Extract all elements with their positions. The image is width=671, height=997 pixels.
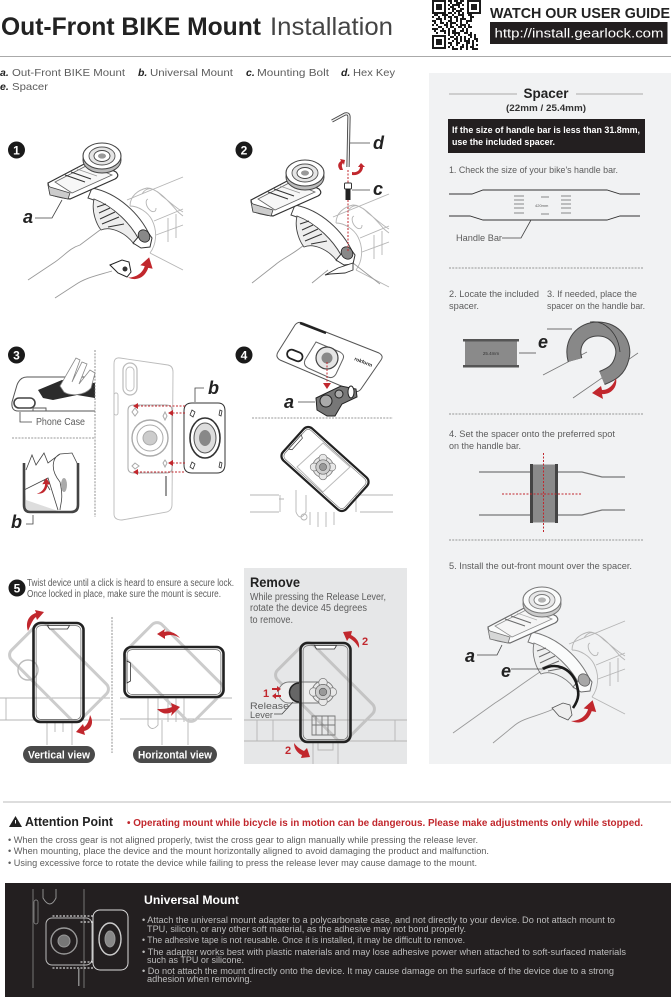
red arrow bbox=[571, 700, 596, 723]
step 5 text bbox=[27, 578, 234, 600]
parts legend: Hex Key bbox=[353, 67, 396, 79]
mount head bbox=[316, 386, 357, 416]
hex key bbox=[332, 114, 349, 167]
universal mount notes: TPU, silicon, or any other soft material, as the adhesive may not bond properly. bbox=[147, 924, 466, 934]
parts legend: Spacer bbox=[12, 81, 49, 93]
label b: b bbox=[208, 378, 219, 398]
cross gear bbox=[310, 454, 336, 480]
label a bbox=[465, 645, 502, 666]
number 2: 2 bbox=[362, 636, 368, 648]
attention bullets: • When the cross gear is not aligned properly, twist the cross gear to align manually while pressing the release lever. bbox=[8, 835, 478, 845]
wiping black area bbox=[38, 380, 95, 400]
panel: remove bbox=[244, 568, 407, 764]
handlebar bbox=[244, 720, 407, 764]
red guide arrows bbox=[133, 403, 185, 475]
step number 1 bbox=[8, 142, 25, 158]
remove text: While pressing the Release Lever, bbox=[250, 592, 386, 603]
label b bbox=[11, 512, 33, 532]
horizontal view pill: Horizontal view bbox=[138, 750, 212, 762]
lever hole bbox=[122, 266, 128, 272]
spacer notice: use the included spacer. bbox=[452, 137, 555, 147]
step 2 bbox=[236, 114, 389, 287]
spacer notice bbox=[448, 119, 645, 153]
step 4 bbox=[236, 322, 393, 527]
spacer notice: If the size of handle bar is less than 31.8mm, bbox=[452, 125, 640, 135]
panel: universal mount bbox=[5, 883, 671, 997]
handle bar diagram bbox=[449, 190, 640, 220]
QR code bbox=[432, 0, 481, 49]
lower scene handlebar bbox=[250, 495, 393, 527]
label c: c bbox=[373, 179, 383, 199]
step 1 bbox=[8, 142, 183, 298]
remove text: rotate the device 45 degrees bbox=[250, 603, 367, 614]
red arrow bbox=[128, 257, 153, 279]
label d: d bbox=[373, 133, 385, 153]
parts legend: a. bbox=[0, 67, 9, 79]
step number 5: 5 bbox=[14, 582, 21, 596]
remove text: to remove. bbox=[250, 615, 293, 626]
vertical view pill bbox=[23, 746, 95, 763]
mounting bolt bbox=[344, 183, 352, 200]
URL box: http://install.gearlock.com bbox=[494, 26, 664, 40]
URL box bbox=[490, 22, 668, 44]
rotation arrows bbox=[338, 159, 365, 175]
release lever label: Release bbox=[250, 701, 289, 712]
out-front mount bbox=[488, 587, 592, 692]
parts legend: Universal Mount bbox=[150, 67, 233, 79]
universal mount icon bbox=[33, 889, 128, 988]
number 2: 2 bbox=[285, 745, 291, 757]
steps 2 and 3 text: 2. Locate the included bbox=[449, 289, 539, 300]
release lever label: Lever bbox=[250, 710, 273, 721]
mount arm bbox=[278, 682, 335, 735]
cross plate bbox=[297, 443, 350, 492]
step number 5 bbox=[8, 580, 26, 596]
release lever bbox=[290, 683, 299, 702]
attention point heading: Attention Point bbox=[25, 815, 114, 829]
case back bbox=[114, 358, 173, 520]
title bbox=[1, 13, 393, 41]
label a: a bbox=[23, 207, 33, 227]
release lever label bbox=[250, 701, 293, 721]
phone case label bbox=[20, 412, 85, 428]
flat spacer bbox=[463, 339, 519, 368]
step number 2: 2 bbox=[241, 144, 248, 158]
red arrow bottom bbox=[294, 743, 310, 758]
parts legend: c. bbox=[246, 67, 255, 79]
title: Installation bbox=[270, 13, 393, 41]
handlebar clamp bbox=[569, 621, 625, 714]
out-front mount bbox=[48, 143, 152, 248]
spacer on bar diagram bbox=[479, 453, 625, 533]
spacer heading: Spacer bbox=[524, 85, 569, 101]
parts legend: Out-Front BIKE Mount bbox=[12, 67, 125, 79]
red arrow bbox=[592, 378, 616, 399]
step number 4: 4 bbox=[241, 348, 248, 362]
label b bbox=[195, 378, 219, 402]
parts legend: d. bbox=[341, 67, 350, 79]
label a: a bbox=[465, 646, 475, 666]
parts legend bbox=[0, 67, 396, 93]
cross gear bbox=[309, 678, 337, 706]
step 4 text: on the handle bar. bbox=[449, 441, 521, 452]
hand lines bbox=[252, 245, 380, 284]
dashed divider vertical bbox=[94, 350, 96, 517]
step number 2 bbox=[236, 142, 252, 158]
attention bullets: • Using excessive force to rotate the device while failing to press the release lever may cause damage to the mount. bbox=[8, 858, 477, 868]
number 1 with arrows bbox=[263, 686, 281, 700]
spacer heading bbox=[449, 85, 643, 114]
universal mount notes: such as TPU or silicone. bbox=[147, 955, 244, 965]
hand lines bbox=[28, 230, 112, 298]
spacer heading: (22mm / 25.4mm) bbox=[506, 103, 586, 114]
label e bbox=[519, 329, 572, 353]
label a bbox=[284, 392, 315, 412]
steps 2 and 3 text bbox=[449, 289, 645, 312]
parts legend: Mounting Bolt bbox=[257, 67, 329, 79]
universal mount heading: Universal Mount bbox=[144, 893, 239, 907]
step 3 bbox=[8, 346, 225, 532]
step 5 text: 5. Install the out-front mount over the spacer. bbox=[449, 561, 632, 572]
parts legend: b. bbox=[138, 67, 147, 79]
step 5 bbox=[0, 578, 234, 763]
step number 1: 1 bbox=[13, 144, 20, 158]
title: Out-Front BIKE Mount bbox=[1, 13, 262, 41]
label a bbox=[23, 200, 62, 227]
case with adhesive bbox=[24, 453, 78, 512]
panel: spacer bbox=[429, 73, 671, 764]
universal mount notes: • Do not attach the mount directly onto the device. It may cause damage on the surface of the device due to a strong bbox=[142, 966, 614, 976]
horizontal view bbox=[120, 620, 232, 745]
steps 2 and 3 text: spacer on the handle bar. bbox=[547, 301, 645, 312]
red arrow down bbox=[323, 362, 331, 389]
step 5 text: Twist device until a click is heard to ensure a secure lock. bbox=[27, 578, 234, 589]
release lever bbox=[110, 260, 131, 277]
label d bbox=[350, 133, 385, 153]
step 1 text: 1. Check the size of your bike's handle bar. bbox=[449, 165, 618, 176]
adapter on case bbox=[128, 405, 172, 496]
camera pill bbox=[14, 398, 35, 408]
universal mount notes: adhesion when removing. bbox=[147, 974, 252, 984]
hand lines bbox=[453, 670, 558, 743]
fingers bbox=[60, 358, 95, 395]
red arrow top bbox=[343, 631, 359, 648]
vertical view pill: Vertical view bbox=[28, 750, 90, 762]
attention bullets bbox=[8, 835, 489, 868]
steps 2 and 3 text: spacer. bbox=[449, 301, 479, 312]
dotted guide line bbox=[347, 170, 349, 252]
dashed divider horizontal bbox=[12, 437, 95, 439]
handle bar diagram: 420mm bbox=[535, 203, 549, 208]
mounted phone bbox=[279, 425, 371, 513]
tilted phone back bbox=[277, 322, 382, 392]
tilted phone back: rokform bbox=[353, 356, 374, 369]
handle bar label: Handle Bar bbox=[456, 233, 502, 244]
tilted phone bbox=[273, 640, 377, 744]
label e bbox=[501, 661, 543, 681]
warning text: • Operating mount while bicycle is in motion can be dangerous. Please make adjustments only while stopped. bbox=[127, 817, 643, 829]
out-front mount bbox=[251, 160, 355, 265]
curved spacer bbox=[543, 322, 638, 398]
case bottom button bbox=[33, 408, 46, 411]
label b: b bbox=[11, 512, 22, 532]
lower clamp bbox=[325, 263, 353, 275]
label e: e bbox=[538, 332, 548, 352]
vertical view bbox=[0, 610, 111, 745]
step 4 text bbox=[449, 429, 615, 452]
handle bar label bbox=[456, 220, 531, 244]
universal mount notes: • The adhesive tape is not reusable. Once it is installed, it may be difficult to remove. bbox=[142, 935, 465, 945]
universal mount notes: • The adapter works best with plastic materials and may lose adhesive power when attached to soft-surfaced materials bbox=[142, 947, 627, 957]
lever bbox=[552, 703, 572, 720]
parts legend: e. bbox=[0, 81, 9, 93]
phone bbox=[300, 643, 350, 742]
step number 4 bbox=[236, 346, 252, 364]
phone case label: Phone Case bbox=[36, 417, 85, 428]
universal mount notes: • Attach the universal mount adapter to a polycarbonate case, and not directly to your device. Do not attach mount to bbox=[142, 915, 615, 925]
handlebar clamp bbox=[333, 194, 389, 287]
black spacer band bbox=[543, 666, 578, 708]
label c bbox=[352, 179, 383, 199]
mount stem bbox=[296, 490, 307, 520]
attention bullets: • When mounting, place the device and the mount horizontally aligned to avoid damaging the product and malfunction. bbox=[8, 846, 489, 856]
horizontal view pill bbox=[133, 746, 217, 763]
phone case corner bbox=[12, 377, 95, 411]
handlebar clamp bbox=[127, 177, 183, 270]
step 4 text: 4. Set the spacer onto the preferred spot bbox=[449, 429, 615, 440]
step number 3 bbox=[8, 346, 25, 364]
remove text bbox=[250, 592, 386, 626]
number 1 with arrows: 1 bbox=[263, 688, 269, 700]
label e: e bbox=[501, 661, 511, 681]
step 5 text: Once locked in place, make sure the mount is secure. bbox=[27, 589, 221, 600]
universal mount notes bbox=[142, 915, 627, 984]
universal mount plate bbox=[184, 403, 225, 473]
label a: a bbox=[284, 392, 294, 412]
step number 3: 3 bbox=[13, 348, 20, 362]
steps 2 and 3 text: 3. If needed, place the bbox=[547, 289, 637, 300]
flat spacer: 25.4mm bbox=[483, 351, 499, 356]
remove heading: Remove bbox=[250, 574, 300, 590]
